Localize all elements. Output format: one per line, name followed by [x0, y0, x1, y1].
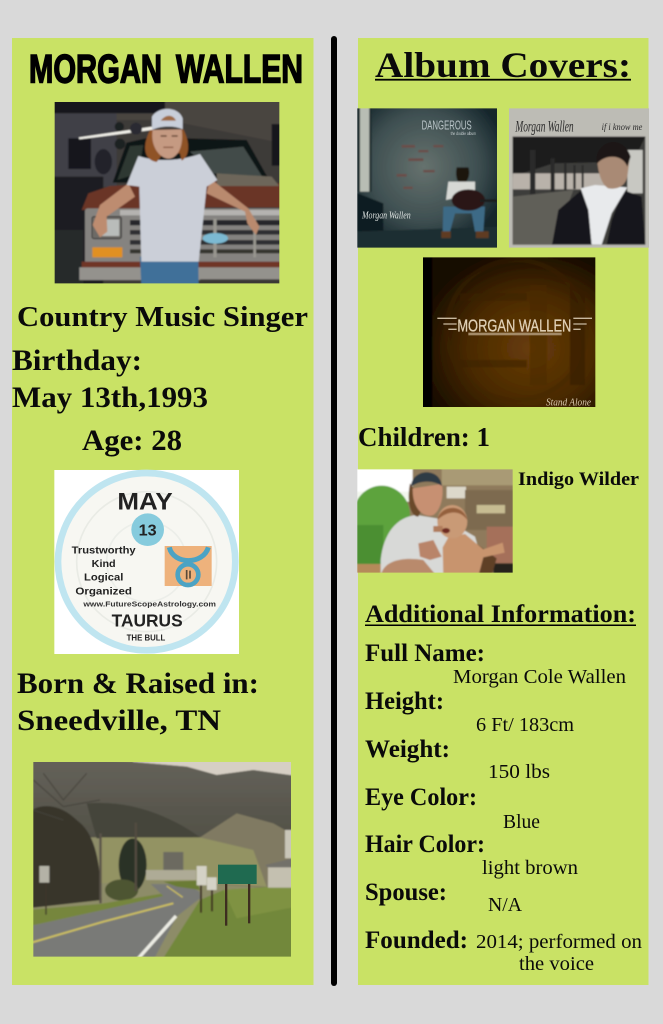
album cover: Stand Alone	[423, 257, 596, 407]
fact: eye color: Blue	[503, 811, 540, 833]
title: MORGAN	[29, 48, 162, 92]
fact: full name: Full Name:	[365, 640, 485, 667]
icon: Taurus symbol	[165, 546, 212, 586]
title	[29, 48, 303, 92]
fact: spouse: N/A	[488, 894, 523, 916]
title: WALLEN	[176, 48, 303, 92]
album cover: Dangerous: the double album	[451, 131, 476, 136]
zodiac badge: Taurus: Logical	[84, 573, 123, 584]
fact: founded: 2014; performed on	[476, 931, 642, 953]
zodiac badge: Taurus: TAURUS	[112, 611, 183, 631]
fact: weight	[365, 736, 550, 783]
birthday: Birthday:	[12, 344, 142, 377]
zodiac badge: Taurus: Trustworthy	[72, 546, 136, 557]
zodiac badge: Taurus	[54, 470, 239, 654]
zodiac badge: Taurus: THE BULL	[127, 633, 166, 643]
zodiac badge: Taurus: Organized	[75, 586, 132, 597]
heading: album covers: Album Covers:	[375, 45, 631, 85]
album cover: Dangerous	[353, 105, 500, 252]
album cover: If I Know Me	[505, 105, 653, 252]
fact: weight: 150 lbs	[488, 761, 550, 783]
fact: full name	[365, 640, 626, 688]
album cover: If I Know Me: Morgan Wallen	[515, 119, 574, 136]
photo: Morgan with child	[353, 466, 517, 576]
fact: weight: Weight:	[365, 736, 450, 763]
fact: founded: Founded:	[365, 927, 468, 954]
zodiac badge: Taurus: MAY	[117, 489, 173, 516]
fact: height: Height:	[365, 688, 444, 715]
fact: hair color: light brown	[482, 857, 578, 879]
album cover: Stand Alone: Stand Alone	[546, 397, 591, 408]
child name: Indigo Wilder	[518, 469, 640, 490]
fact: hair color: Hair Color:	[365, 831, 485, 858]
zodiac badge: Taurus: www.FutureScopeAstrology.com	[82, 600, 217, 609]
album cover: Dangerous: Morgan Wallen	[361, 210, 411, 221]
hometown heading: Sneedville, TN	[17, 704, 221, 737]
fact: spouse	[365, 879, 523, 916]
fact: height: 6 Ft/ 183cm	[476, 714, 574, 736]
album cover: Dangerous: DANGEROUS	[422, 117, 472, 132]
fact: spouse: Spouse:	[365, 879, 447, 906]
fact: hair color	[365, 831, 578, 879]
fact: height	[365, 688, 574, 736]
children heading: Children: 1	[358, 422, 490, 452]
zodiac badge: Taurus: 13	[139, 522, 157, 539]
age: Age: 28	[82, 424, 182, 457]
photo: Sneedville road	[27, 757, 297, 963]
photo: Morgan Wallen leaning on truck	[50, 97, 283, 287]
hometown heading	[17, 667, 259, 737]
fact: eye color	[365, 784, 540, 833]
birthday	[12, 344, 208, 414]
fact: founded	[365, 927, 642, 975]
heading: additional information: Additional Information:	[365, 601, 636, 628]
birthday: May 13th,1993	[12, 381, 208, 414]
fact: founded: the voice	[519, 953, 594, 975]
fact: eye color: Eye Color:	[365, 784, 477, 811]
album cover: If I Know Me: if i know me	[602, 122, 642, 133]
subtitle: occupation: Country Music Singer	[17, 301, 308, 333]
panel: left profile	[12, 38, 314, 985]
centre divider	[331, 36, 337, 986]
hometown heading: Born & Raised in:	[17, 667, 259, 700]
panel: right details	[353, 38, 653, 985]
fact: full name: Morgan Cole Wallen	[453, 666, 626, 688]
zodiac badge: Taurus: Kind	[92, 559, 116, 570]
album cover: Stand Alone: MORGAN WALLEN	[457, 316, 571, 336]
